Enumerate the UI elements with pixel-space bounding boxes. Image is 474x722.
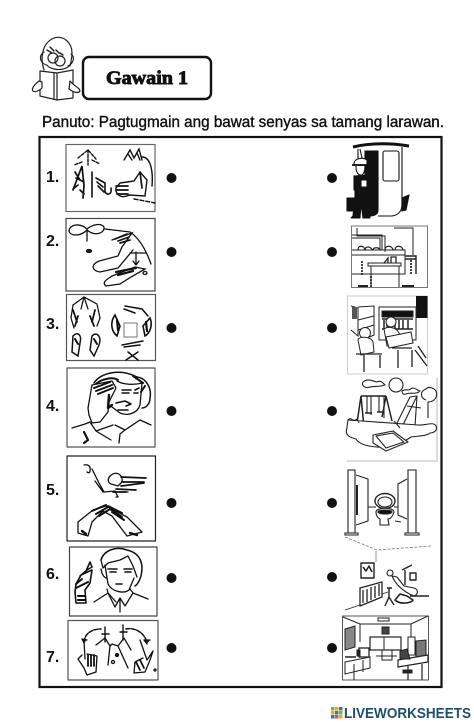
left dot 2	[166, 247, 176, 257]
picture 3: library	[348, 296, 428, 374]
number 4: 4.	[46, 398, 59, 415]
number 7: 7.	[46, 649, 59, 666]
number 3: 3.	[46, 316, 59, 333]
sign image 2	[66, 218, 155, 291]
picture 7: computer classroom	[342, 616, 428, 680]
left dot 5	[166, 498, 176, 508]
icon: logo colour grid	[331, 707, 342, 718]
picture 2: school canteen	[352, 226, 428, 288]
right dot 3	[327, 323, 337, 333]
left dot 1	[166, 173, 176, 183]
left dot 6	[166, 573, 176, 583]
sign image 7	[68, 620, 158, 680]
sign image 6	[70, 547, 157, 616]
picture 4: playground	[346, 378, 437, 461]
number 6: 6.	[46, 566, 59, 583]
title box	[83, 57, 211, 99]
heading: Gawain 1: Gawain 1	[106, 69, 188, 89]
right dot 5	[327, 498, 337, 508]
panel: matching exercise frame	[40, 137, 442, 687]
right dot 6	[327, 572, 337, 582]
right dot 2	[327, 247, 337, 257]
number 2: 2.	[46, 233, 59, 250]
sign image 4	[67, 368, 155, 447]
left dot 7	[166, 643, 176, 653]
left dot 4	[166, 406, 176, 416]
picture 5: toilet	[345, 470, 419, 535]
sign image 5	[67, 456, 156, 541]
row numbers	[46, 169, 59, 666]
instructions text: Panuto: Pagtugmain ang bawat senyas sa tamang larawan.	[42, 114, 444, 131]
sign image 1	[66, 144, 155, 212]
number 1: 1.	[46, 169, 59, 186]
right dot 1	[327, 173, 337, 183]
footer: LIVEWORKSHEETS logo	[331, 706, 471, 722]
left matching dots	[166, 173, 176, 653]
picture 1: guard at a booth	[347, 144, 409, 218]
left dot 3	[166, 323, 176, 333]
icon: child reading a book	[32, 37, 80, 100]
right dot 4	[327, 406, 337, 416]
number 5: 5.	[46, 482, 59, 499]
picture 6: dental clinic	[345, 537, 431, 610]
right dot 7	[327, 643, 337, 653]
sign image 3	[66, 294, 156, 360]
right matching dots	[327, 173, 337, 653]
